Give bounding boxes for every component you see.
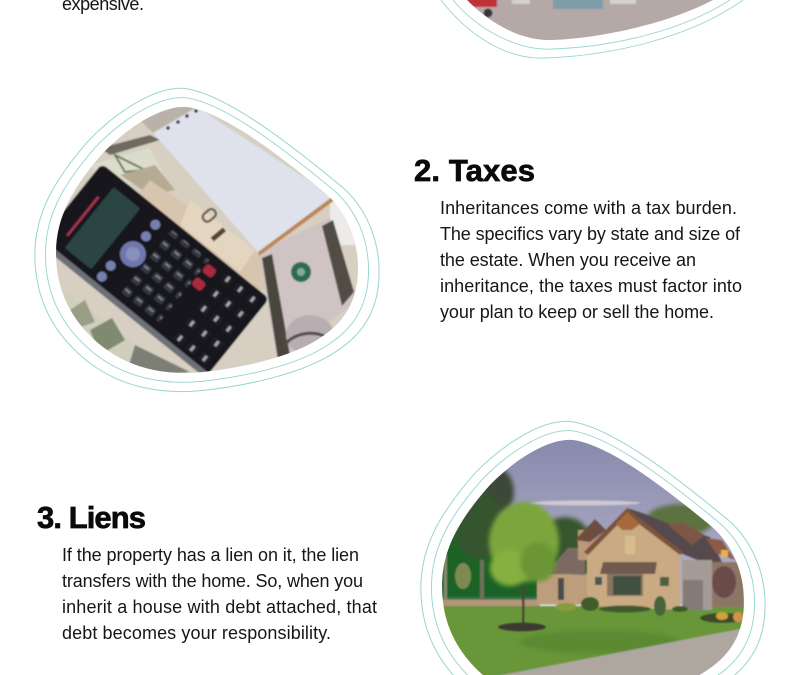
bill, right xyxy=(330,200,356,246)
calculator screen xyxy=(65,187,140,269)
tree trunks xyxy=(444,555,447,600)
background trees xyxy=(440,468,714,600)
gable window xyxy=(625,536,635,554)
text block: liens body: If the property has a lien on it, the lien xyxy=(62,545,359,565)
top buttons xyxy=(149,218,162,231)
photo 3 xyxy=(435,435,750,675)
lit window xyxy=(721,550,728,557)
text block: taxes body: inheritance, the taxes must factor into xyxy=(440,276,742,296)
notepad xyxy=(153,107,334,252)
left wing xyxy=(537,574,587,604)
number keys xyxy=(176,275,256,363)
d-pad xyxy=(118,240,148,268)
fence xyxy=(440,600,540,606)
money background xyxy=(50,100,365,380)
text block: taxes body: The specifics vary by state and size of xyxy=(440,224,741,244)
text block: taxes body: the estate. When you receive an xyxy=(440,250,696,270)
outer rings 3 xyxy=(421,421,765,675)
text block: liens body xyxy=(62,545,377,643)
function keys xyxy=(119,230,209,326)
text block: taxes body: Inheritances come with a tax burden. xyxy=(440,198,737,218)
text block: taxes body xyxy=(440,198,742,322)
text block: liens body: transfers with the home. So, when you xyxy=(62,571,363,591)
sky xyxy=(435,435,750,605)
red keys xyxy=(202,263,217,278)
photo panel 3: brick house xyxy=(421,421,765,675)
front tree xyxy=(522,585,524,625)
photo 1 xyxy=(467,0,713,40)
awning and window xyxy=(600,562,657,574)
right small tree xyxy=(712,566,736,598)
text block: taxes body: your plan to keep or sell the home. xyxy=(440,302,714,322)
bushes xyxy=(555,596,744,623)
driveway xyxy=(487,628,745,675)
outer rings 1 xyxy=(441,0,743,58)
lawn xyxy=(435,606,750,675)
text block: liens body: debt becomes your responsibility. xyxy=(62,623,331,643)
left sapling xyxy=(455,563,471,589)
garage xyxy=(682,560,712,610)
calculator xyxy=(56,165,268,372)
roof right xyxy=(627,508,722,566)
text block: liens body: inherit a house with debt attached, that xyxy=(62,597,377,617)
outer rings 2 xyxy=(35,88,379,392)
heading: 2. Taxes: 2. Taxes xyxy=(414,153,535,188)
photo panel 2: calculator and money xyxy=(35,88,379,392)
photo panel 1: floor with toys xyxy=(430,0,750,58)
photo 2 xyxy=(56,106,358,373)
heading: 3. Liens: 3. Liens xyxy=(37,500,146,535)
main wall xyxy=(586,524,681,610)
